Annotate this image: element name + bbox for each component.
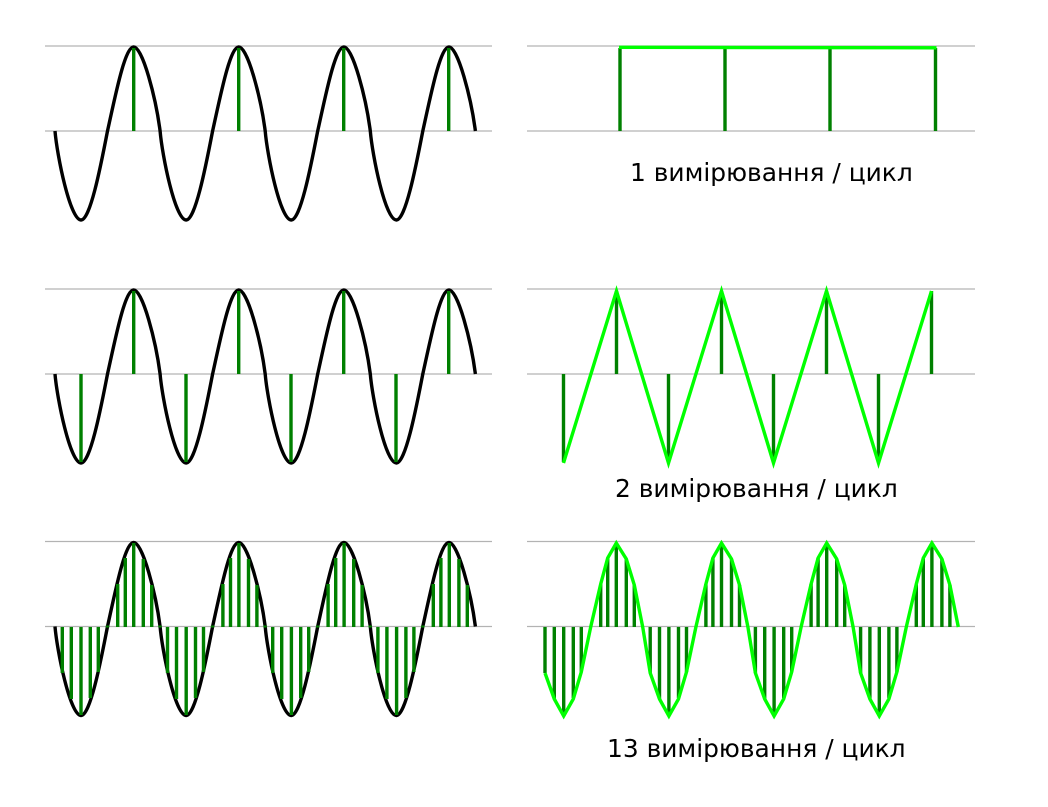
panel: original signal, 1 sample per cycle (45, 46, 492, 220)
sample stems (545, 543, 950, 715)
panel: original signal, 2 samples per cycle (45, 289, 492, 463)
sample stems (564, 291, 932, 462)
panel: original signal, 13 samples per cycle (45, 542, 492, 716)
caption: 1 sample per cycle: 1 вимірювання / цикл (630, 158, 913, 187)
sine wave (55, 290, 475, 463)
panel: reconstruction, 1 sample per cycle (527, 46, 975, 131)
reconstructed line (545, 543, 958, 716)
caption: 13 samples per cycle: 13 вимірювання / цикл (607, 734, 906, 763)
reconstructed line (564, 291, 932, 463)
sample stems (620, 48, 936, 131)
caption: 2 samples per cycle: 2 вимірювання / цикл (615, 474, 898, 503)
sample stems (134, 48, 449, 131)
sine wave (55, 47, 475, 220)
panel: reconstruction, 2 samples per cycle (527, 289, 975, 463)
sample stems (62, 543, 467, 715)
panel: reconstruction, 13 samples per cycle (527, 542, 975, 716)
sine wave (55, 542, 475, 716)
reconstructed line (619, 46, 936, 49)
sample stems (81, 291, 449, 462)
